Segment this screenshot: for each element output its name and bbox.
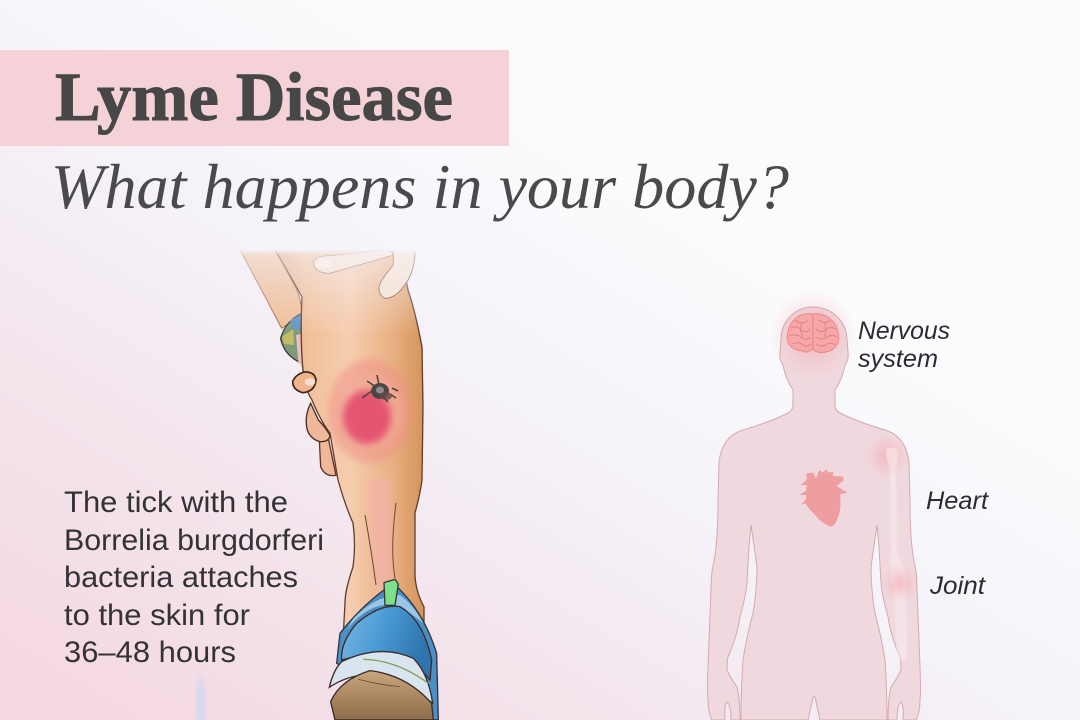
illustration: leg with tick bite [240, 250, 424, 640]
rash [328, 359, 412, 463]
glow: shoulder joint [865, 434, 909, 478]
text block: tick attachment: The tick with the [64, 486, 288, 519]
text block: tick attachment: Borrelia burgdorferi [64, 524, 324, 557]
text block: tick attachment [64, 486, 324, 669]
leg [275, 250, 424, 640]
label: nervous system: Nervous [858, 317, 950, 345]
label: nervous system [858, 317, 950, 373]
icon: tick [362, 375, 398, 402]
body diagram [708, 289, 920, 720]
text block: tick attachment: to the skin for [64, 599, 250, 632]
far arm with wristband [240, 250, 304, 372]
icon: arm bone [886, 448, 907, 660]
text block: tick attachment: 36–48 hours [64, 636, 236, 669]
icon: heart [799, 469, 847, 527]
body silhouette [708, 307, 920, 720]
hand fingers gripping the leg [293, 372, 336, 476]
subtitle: What happens in your body? [51, 152, 789, 222]
hand fingers on top [313, 250, 415, 298]
label: joint: Joint [929, 572, 986, 600]
icon: brain [787, 314, 839, 353]
title: Lyme Disease [55, 59, 453, 135]
glow: head [769, 289, 857, 381]
label: heart: Heart [926, 487, 989, 515]
shoe sole [331, 671, 433, 720]
shoe [329, 579, 438, 720]
text block: tick attachment: bacteria attaches [64, 561, 298, 594]
calf tendon highlight [368, 480, 392, 590]
title band [0, 50, 509, 146]
shoe pull tab [384, 579, 398, 605]
glow: elbow joint [880, 563, 920, 603]
label: nervous system: system [858, 345, 938, 373]
